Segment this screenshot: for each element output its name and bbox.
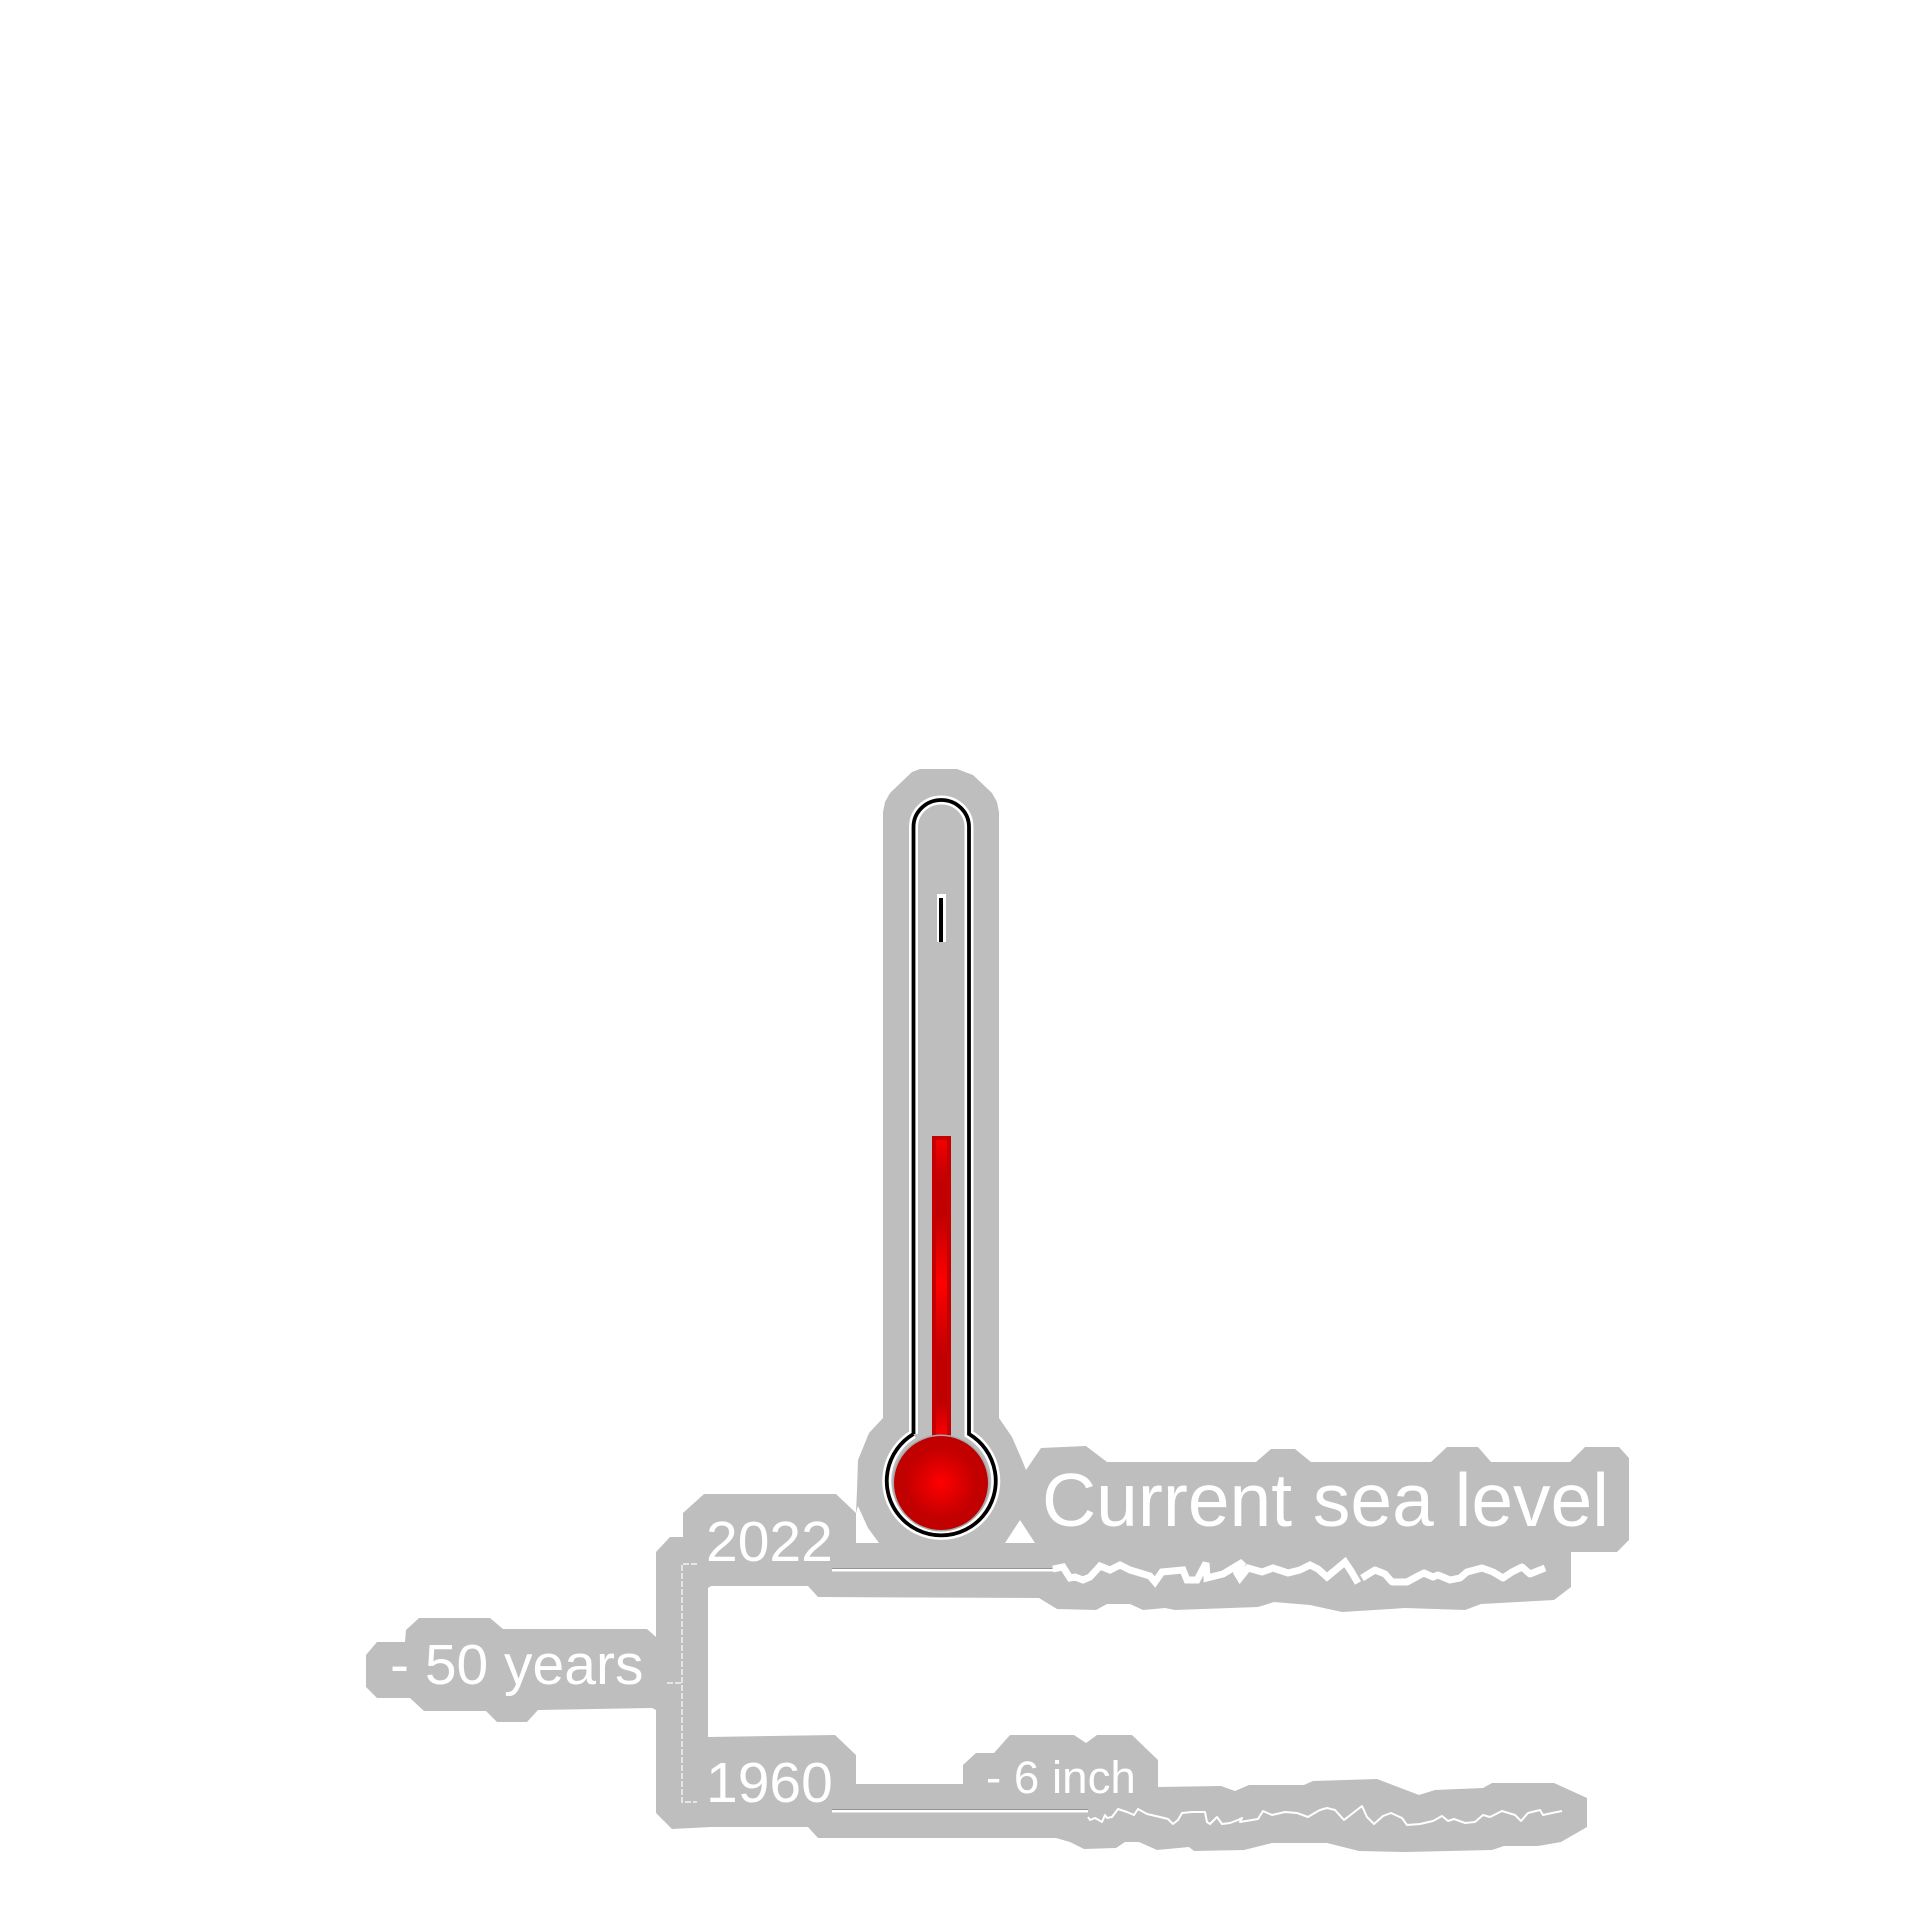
grey silhouette behind all elements bbox=[366, 769, 1629, 1852]
1960 sea level wave bbox=[1088, 1806, 1562, 1825]
2022 sea level line bbox=[832, 1568, 1054, 1572]
label: 2022: 2022 bbox=[706, 1510, 833, 1574]
label: Current sea level: Current sea level bbox=[1042, 1458, 1609, 1542]
label: - 50 years: - 50 years bbox=[390, 1633, 643, 1697]
2022 sea level wave bbox=[1053, 1562, 1358, 1583]
thermometer bulb bbox=[892, 1434, 990, 1532]
label: 1960: 1960 bbox=[706, 1751, 833, 1815]
1960 sea level line bbox=[832, 1809, 1088, 1812]
thermometer tick mark bbox=[937, 894, 946, 942]
label: - 6 inch: - 6 inch bbox=[986, 1752, 1136, 1803]
mercury column bbox=[932, 1136, 951, 1440]
bracket spanning 1960 to 2022 bbox=[667, 1564, 697, 1802]
thermometer outline bbox=[887, 800, 996, 1535]
thermometer bbox=[887, 800, 996, 1535]
